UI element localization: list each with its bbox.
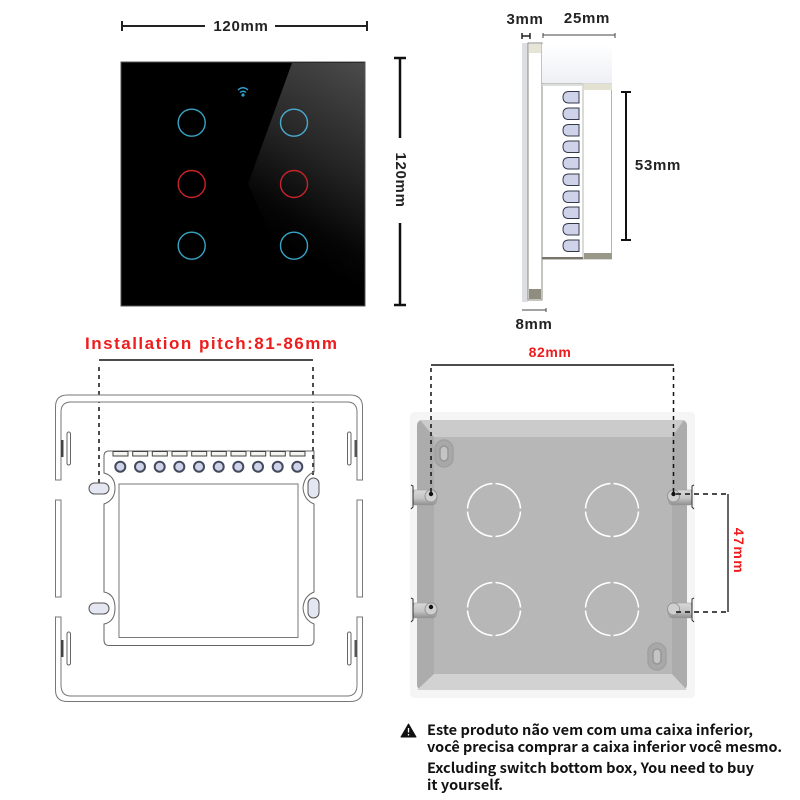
dimension: 82mm — [429, 344, 676, 609]
oval lugs — [435, 440, 666, 670]
dimension: 3mm: 3mm — [506, 11, 544, 28]
notice text: você precisa comprar a caixa inferior você mesmo. — [427, 737, 782, 757]
heading: installation pitch: Installation pitch:81-86mm — [85, 334, 337, 353]
metal clips — [413, 490, 692, 618]
dimension: panel height 120mm — [392, 58, 409, 305]
notice text — [427, 720, 782, 795]
dimension: 53mm: 53mm — [635, 157, 681, 174]
mounting slots — [89, 478, 319, 618]
terminal row — [113, 452, 305, 456]
dimension: 82mm: 82mm — [529, 344, 571, 360]
icon: warning triangle — [401, 724, 416, 737]
dimension: panel width 120mm: 120mm — [213, 18, 269, 35]
dimension: panel width 120mm — [122, 18, 367, 35]
touch buttons — [178, 109, 308, 259]
dimension: 47mm — [676, 494, 747, 612]
notice text: Excluding switch bottom box, You need to buy — [427, 758, 754, 778]
notice text: Este produto não vem com uma caixa inferior, — [427, 720, 753, 740]
black glass touch switch panel — [121, 62, 365, 306]
box inner walls — [420, 420, 684, 437]
dimension: 3mm — [506, 11, 544, 39]
notice text: it yourself. — [427, 775, 503, 795]
central module outline — [104, 451, 314, 646]
bottom box — [410, 412, 695, 698]
glass reflection — [248, 63, 364, 300]
box floor — [434, 437, 672, 674]
icon: wifi — [238, 88, 248, 96]
dimension line: installation pitch — [99, 360, 313, 488]
side view of switch — [522, 43, 612, 302]
side slots — [67, 432, 70, 465]
dimension: panel height 120mm: 120mm — [392, 152, 409, 208]
dimension: 47mm: 47mm — [731, 528, 747, 574]
clip screws — [425, 490, 680, 615]
mounting plate rear drawing — [56, 395, 362, 702]
dimension: 25mm: 25mm — [564, 10, 610, 27]
central window — [119, 484, 298, 638]
terminal screws — [563, 92, 579, 252]
dimension: 25mm — [543, 10, 615, 38]
dimension: 53mm — [621, 92, 681, 240]
dimension: 8mm — [515, 308, 553, 333]
dimension: 8mm: 8mm — [515, 316, 553, 333]
knockout circles — [468, 484, 638, 636]
plate outer frame — [56, 395, 362, 480]
